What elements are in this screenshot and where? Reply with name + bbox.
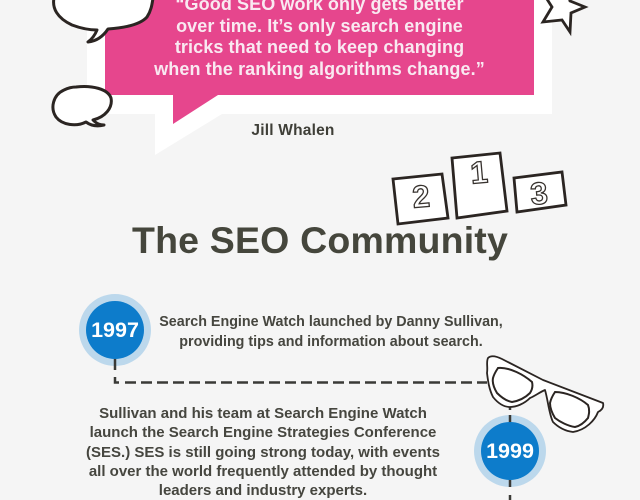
quote text xyxy=(154,0,485,79)
1997 year label: 1997 xyxy=(91,318,139,342)
podium block 1 xyxy=(452,153,507,218)
podium block 3 xyxy=(514,172,566,212)
1999 description xyxy=(86,405,440,499)
timeline dashed connector xyxy=(115,352,487,382)
timeline vertical line to 1999 xyxy=(509,405,511,500)
quote bubble pink xyxy=(105,0,534,124)
podium block 1: 1 xyxy=(469,154,489,191)
quote text: tricks that need to keep changing xyxy=(175,37,464,57)
podium block 2 xyxy=(393,174,448,224)
quote text: over time. It’s only search engine xyxy=(176,16,463,36)
podium block 3: 3 xyxy=(529,175,549,212)
1999 description: launch the Search Engine Strategies Conference xyxy=(90,424,436,441)
1997 description: Search Engine Watch launched by Danny Sullivan, xyxy=(159,314,503,330)
podium block 2: 2 xyxy=(411,178,431,215)
1997 description: providing tips and information about search. xyxy=(179,334,483,350)
quote bubble white backing xyxy=(87,0,552,155)
1999 description: Sullivan and his team at Search Engine Watch xyxy=(99,405,427,422)
quote attribution: Jill Whalen xyxy=(251,122,335,139)
1999 year label: 1999 xyxy=(486,439,534,463)
icon: glasses xyxy=(487,356,603,432)
1997 badge xyxy=(86,301,144,359)
1999 badge xyxy=(481,422,539,480)
1999 description: all over the world frequently attended by thought xyxy=(89,463,437,480)
1999 description: (SES.) SES is still going strong today, with events xyxy=(86,444,440,461)
1997 description xyxy=(159,314,503,350)
icon: large speech bubble xyxy=(54,0,153,42)
1999 badge ring xyxy=(474,415,546,487)
quote text: when the ranking algorithms change.” xyxy=(154,59,485,79)
icon: podium xyxy=(393,153,566,224)
title: The SEO Community xyxy=(132,219,508,261)
icon: small speech bubble xyxy=(53,86,111,126)
icon: star xyxy=(543,0,585,32)
1999 description: leaders and industry experts. xyxy=(159,482,367,499)
1997 badge ring xyxy=(79,294,151,366)
